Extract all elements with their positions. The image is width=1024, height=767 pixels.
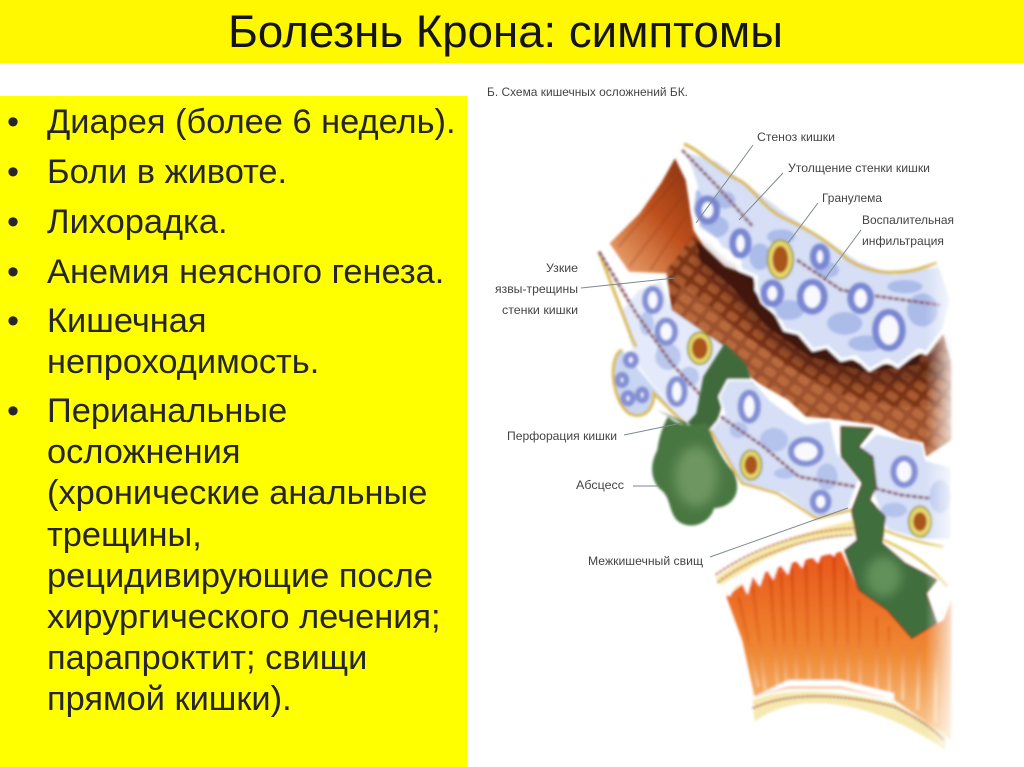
lower artwork [652,343,951,750]
orange villi stripes [739,557,937,723]
label: narrow fissure ulcers: язвы-трещины [495,282,578,296]
label: interintestinal fistula: Межкишечный свищ [588,554,703,568]
symptom: perianal complications: трещины, [47,516,202,554]
diagram caption: Б. Схема кишечных осложнений БК. [487,85,688,99]
intestine artwork [599,144,951,457]
crypts in lower left wall and polyp [618,289,685,404]
symptom: diarrhea: Диарея (более 6 недель). [47,103,456,141]
upper bowel wall [682,150,951,370]
right wall yellow serosa [884,530,947,587]
middle wall muscle layer [721,417,855,487]
title: Болезнь Крона: симптомы [228,6,783,57]
label: inflammatory infiltration: инфильтрация [862,234,944,248]
bullet: • [7,302,19,340]
symptom: perianal complications: прямой кишки). [47,680,292,718]
lower bowel band lines [716,528,854,583]
symptom: perianal complications: рецидивирующие после [47,557,433,595]
label: narrow fissure ulcers: стенки кишки [502,303,578,317]
lower left wall yellow serosa [599,252,686,425]
right edge fade [925,200,960,767]
granuloma, upper wall [768,240,793,279]
symptom: intestinal obstruction: непроходимость. [47,343,319,381]
leader lines [581,145,861,557]
symptom: perianal complications: осложнения [47,433,240,471]
label: narrow fissure ulcers [495,261,578,317]
diagram: intestinal complications of Crohn's disease [488,87,954,750]
symptom: perianal complications [47,392,441,718]
symptom: intestinal obstruction [47,302,319,381]
lighter lower edge of mucosa [671,283,951,457]
dark crevice [696,240,922,372]
upper wall muscle layer [682,150,940,305]
brown mucosa band [666,237,951,457]
label: inflammatory infiltration: Воспалительная [862,213,954,227]
symptom: perianal complications: парапроктит; свищи [47,639,367,677]
bottom band [753,691,945,750]
symptom: fever: Лихорадка. [47,203,228,241]
label: inflammatory infiltration [862,213,954,248]
right wall muscle layer [875,488,930,498]
label: perforation: Перфорация кишки [507,429,617,443]
symptom: perianal complications: (хронические анальные [47,474,427,512]
bottom band line [753,696,944,740]
label: stenosis: Стеноз кишки [757,130,835,144]
blue mottling of upper wall [689,190,938,351]
label: narrow fissure ulcers: Узкие [546,261,578,275]
bullet: • [7,253,19,291]
fold ridges [618,177,691,270]
crypt in right wall [893,458,915,485]
panel: symptoms list [0,96,467,767]
bullet: • [7,103,19,141]
lower orange mucosa [726,552,951,740]
granuloma, lower left wall [688,332,712,364]
lower left wall mottling [640,311,699,387]
symptom: perianal complications: хирургического лечения; [47,598,441,636]
right bowel wall [859,433,951,540]
label: granuloma: Гранулема [822,191,882,205]
symptom: intestinal obstruction: Кишечная [47,302,206,340]
bottom white fringe [755,680,894,700]
crypts in middle wall [741,393,828,511]
lower left wall [622,282,725,425]
lower bowel top band [716,520,855,595]
granuloma, middle wall [740,450,762,480]
bullet: • [7,392,19,430]
abscess [652,417,737,525]
lower bowel white teeth [721,533,857,597]
fistula highlight [866,557,901,597]
label: abscess: Абсцесс [576,478,624,492]
bullet: • [7,203,19,241]
symptom: anemia: Анемия неясного генеза. [47,253,444,291]
middle wall mottling [729,422,838,490]
abscess highlight [675,447,717,507]
label: wall thickening: Утолщение стенки кишки [788,161,930,175]
fistula [841,427,937,638]
symptom: abdominal pain: Боли в животе. [47,153,287,191]
header band [0,0,1024,63]
upper wall outer yellow serosa [684,144,937,272]
symptom: perianal complications: Перианальные [47,392,287,430]
middle wall serosa [710,430,852,518]
upper orange mucosa folds [610,158,710,273]
dark crevice shadow [696,240,947,387]
right wall mottling [881,480,951,517]
middle bowel wall [710,380,859,518]
white cover right of fade [960,200,1024,767]
green channel behind middle wall [657,343,753,433]
crypts in upper wall [698,199,902,348]
lower left wall muscle layer [599,252,705,400]
granuloma, right wall [909,506,931,537]
bullet: • [7,153,19,191]
